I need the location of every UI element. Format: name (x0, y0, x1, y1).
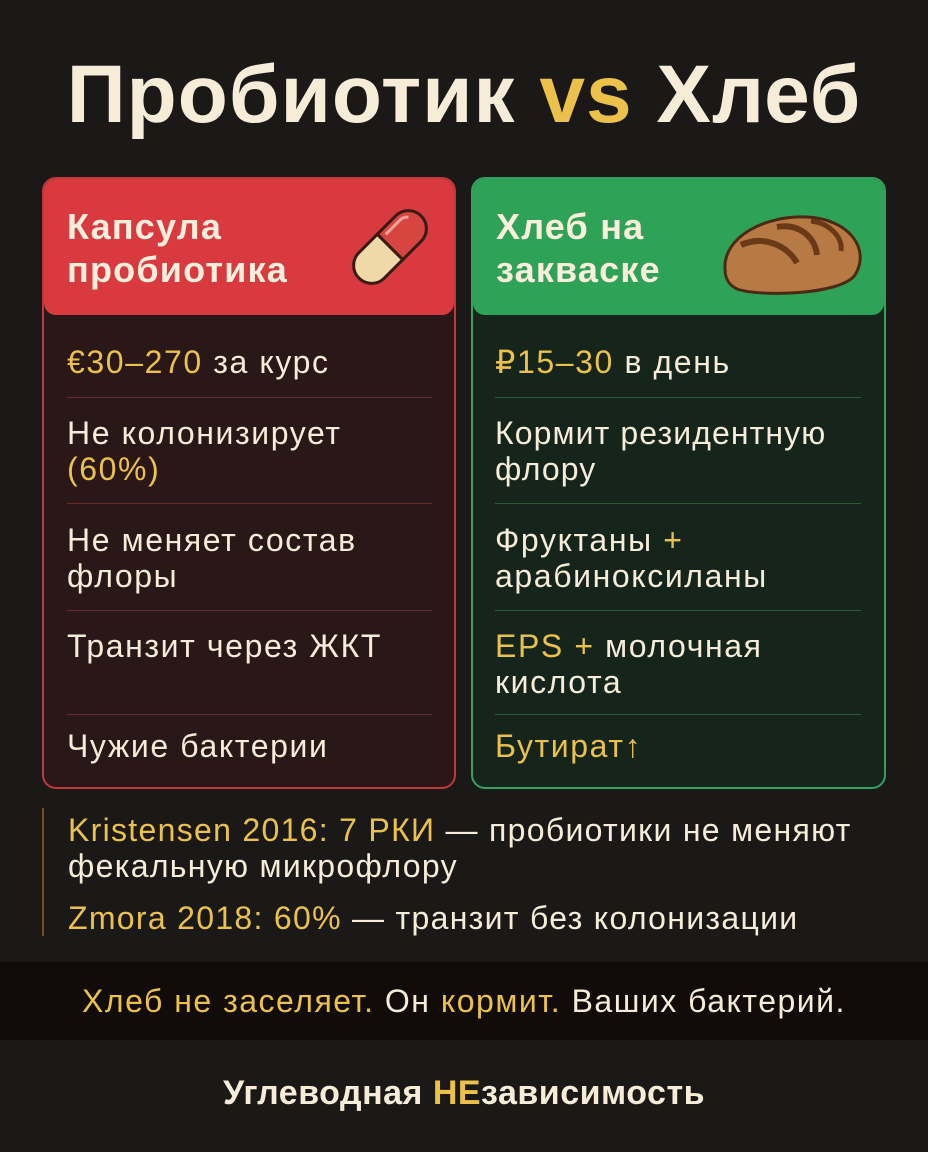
row texts: bread: ₽15–30 в день (495, 344, 731, 380)
icon: bread loaf (723, 215, 862, 295)
row texts: probiotic: Не меняет состав (67, 522, 357, 558)
row texts: probiotic: €30–270 за курс (67, 344, 330, 380)
row texts: probiotic (67, 344, 382, 764)
footnotes: studies (42, 808, 892, 936)
row texts: bread: Кормит резидентную (495, 415, 826, 451)
row texts: bread: EPS + молочная (495, 628, 763, 664)
row texts: probiotic: Чужие бактерии (67, 728, 328, 764)
panel: probiotic (42, 177, 456, 789)
row texts: probiotic: (60%) (67, 451, 160, 487)
footnotes: studies: Kristensen 2016: 7 РКИ — пробиотики не меняют (68, 812, 852, 848)
heading: Хлеб на закваске: Хлеб на (496, 206, 644, 247)
row texts: bread (495, 344, 826, 764)
row texts: bread: арабиноксиланы (495, 558, 768, 594)
heading: Хлеб на закваске: закваске (496, 249, 661, 290)
callout band: Хлеб не заселяет. Он кормит. Ваших бактерий. (82, 983, 846, 1019)
footnotes: studies: Zmora 2018: 60% — транзит без колонизации (68, 900, 798, 936)
panel header: bread (473, 179, 884, 315)
row texts: probiotic: Транзит через ЖКТ (67, 628, 382, 664)
panel header: probiotic (44, 179, 454, 315)
heading: Капсула пробиотика: Капсула (67, 206, 222, 247)
row texts: bread: Бутират↑ (495, 728, 642, 764)
row texts: bread: флору (495, 451, 596, 487)
row texts: probiotic: флоры (67, 558, 178, 594)
heading: Хлеб на закваске (496, 206, 661, 290)
footnotes: studies: фекальную микрофлору (68, 848, 458, 884)
row texts: probiotic: Не колонизирует (67, 415, 342, 451)
icon: capsule (352, 209, 428, 285)
heading: Капсула пробиотика (67, 206, 288, 290)
panel: bread (471, 177, 886, 789)
row texts: bread: Фруктаны + (495, 522, 683, 558)
callout band (0, 962, 928, 1040)
footer brand: Углеводная НЕзависимость (223, 1074, 705, 1112)
heading: Капсула пробиотика: пробиотика (67, 249, 288, 290)
row texts: bread: кислота (495, 664, 622, 700)
title: Пробиотик vs Хлеб (67, 49, 861, 140)
